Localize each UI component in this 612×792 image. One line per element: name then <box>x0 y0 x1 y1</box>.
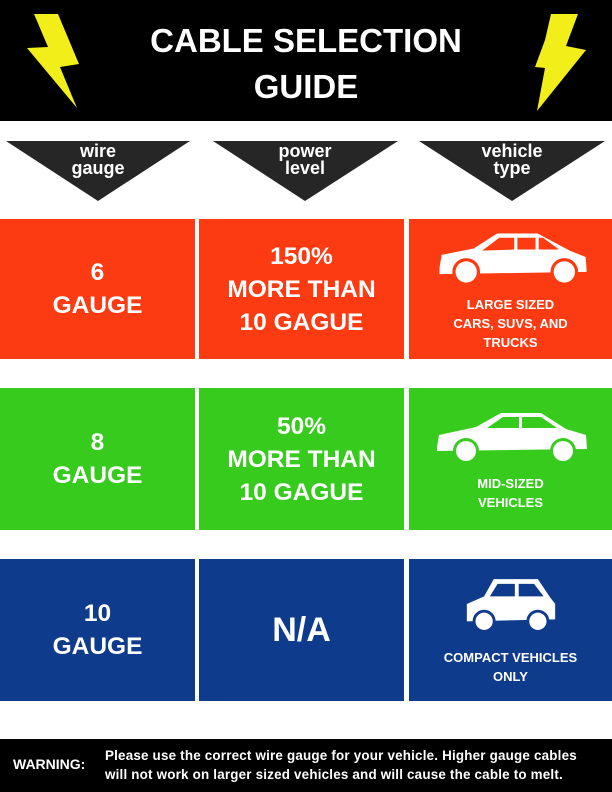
row: 6 gauge: MORE THAN <box>227 276 376 302</box>
footer warning <box>0 739 612 792</box>
title: GUIDE <box>254 68 358 105</box>
column headers: power <box>278 141 332 161</box>
row: 10 gauge: COMPACT VEHICLES <box>444 650 577 665</box>
row: 8 gauge: VEHICLES <box>478 495 543 510</box>
footer warning: Please use the correct wire gauge for your vehicle. Higher gauge cables <box>105 748 577 763</box>
row: 6 gauge: GAUGE <box>53 292 142 319</box>
row: 6 gauge: LARGE SIZED <box>467 296 554 312</box>
title: CABLE SELECTION <box>150 22 462 59</box>
row: 10 gauge <box>0 559 612 701</box>
row: 6 gauge: 10 GAGUE <box>240 308 363 336</box>
column headers: level <box>285 158 325 178</box>
row: 8 gauge: MORE THAN <box>227 446 376 472</box>
column headers: type <box>493 158 530 178</box>
row: 10 gauge: 10 <box>84 600 111 627</box>
footer warning: will not work on larger sized vehicles and will cause the cable to melt. <box>105 767 563 782</box>
row: 8 gauge: 50% <box>277 412 326 440</box>
row: 8 gauge: GAUGE <box>53 462 142 489</box>
row: 10 gauge: N/A <box>272 610 331 648</box>
title <box>150 22 462 105</box>
row: 6 gauge: 150% <box>270 242 333 270</box>
row: 8 gauge: 8 <box>91 429 104 456</box>
row: 6 gauge <box>0 219 612 359</box>
column headers: wire <box>80 141 116 161</box>
column headers: vehicle <box>481 141 543 161</box>
row: 8 gauge <box>0 388 612 530</box>
icon: bolts <box>27 14 586 111</box>
row: 10 gauge: ONLY <box>493 669 528 684</box>
footer warning: WARNING: <box>13 756 85 772</box>
column headers: gauge <box>71 158 124 178</box>
row: 8 gauge: MID-SIZED <box>477 476 544 491</box>
row: 10 gauge: GAUGE <box>53 633 142 660</box>
row: 6 gauge: TRUCKS <box>483 334 538 350</box>
row: 6 gauge: 6 <box>91 259 104 286</box>
row: 8 gauge: 10 GAGUE <box>240 478 363 506</box>
row: 6 gauge: CARS, SUVS, AND <box>453 316 568 330</box>
column headers <box>6 141 605 201</box>
header <box>0 0 612 121</box>
